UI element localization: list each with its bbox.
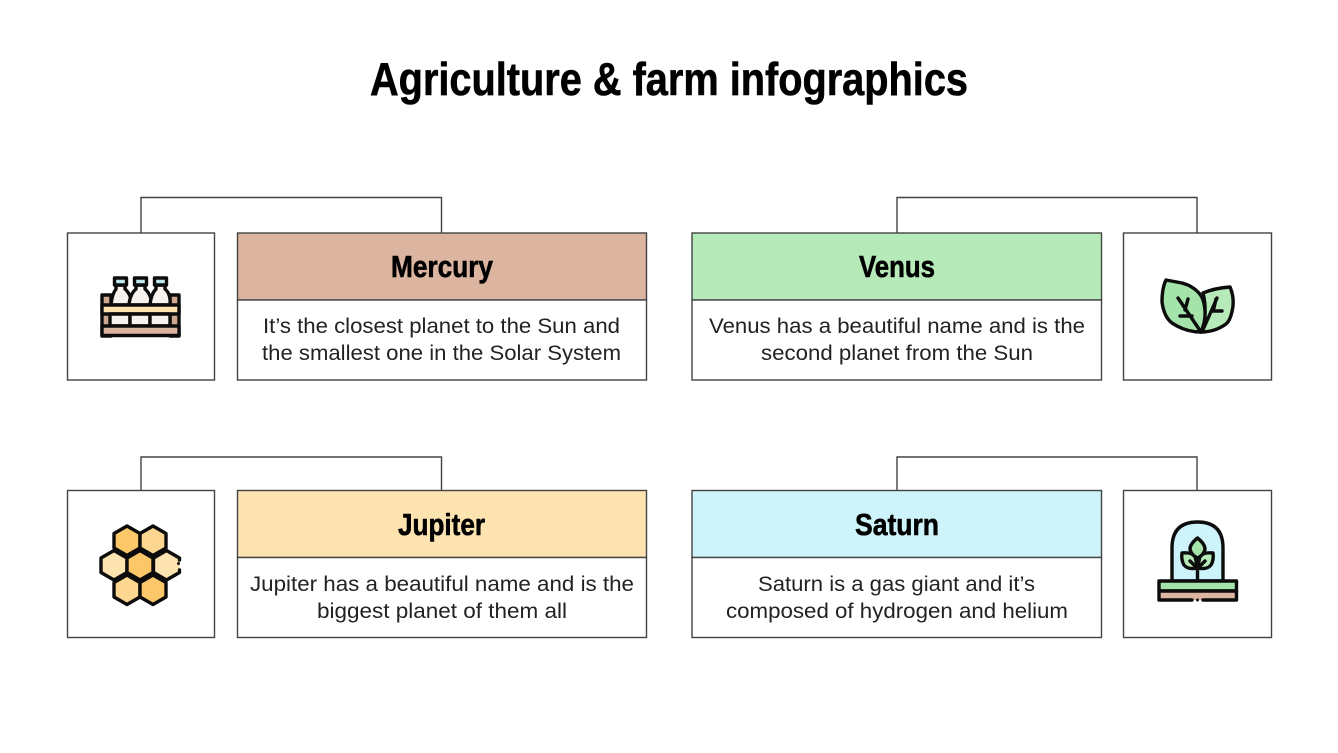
description: Venus: second planet from the Sun [761, 341, 1033, 365]
icon box: Venus [1124, 233, 1272, 380]
connector: Saturn [897, 457, 1197, 490]
header: Mercury [238, 233, 646, 300]
header: Jupiter [238, 490, 646, 558]
text box: Jupiter [238, 558, 646, 638]
description: Mercury: It’s the closest planet to the Sun and [263, 314, 620, 338]
icon box: Jupiter [68, 490, 214, 638]
panel: Saturn [692, 457, 1272, 638]
header: Saturn [692, 490, 1102, 558]
panel: Venus [692, 198, 1272, 380]
label: Mercury: Mercury [391, 249, 494, 284]
text box: Saturn [692, 558, 1102, 638]
title: Agriculture & farm infographics [370, 53, 968, 105]
panel: Mercury [68, 198, 646, 380]
description: Saturn: Saturn is a gas giant and it’s [758, 572, 1035, 596]
description: Jupiter: biggest planet of them all [317, 599, 567, 623]
description: Venus: Venus has a beautiful name and is the [709, 314, 1085, 338]
description: Mercury: the smallest one in the Solar System [262, 341, 621, 365]
connector: Mercury [141, 198, 442, 233]
icon box: Mercury [68, 233, 214, 380]
icon: greenhouse plant [1159, 522, 1236, 601]
connector: Jupiter [141, 457, 442, 490]
label: Saturn: Saturn [855, 507, 939, 542]
description: Saturn: composed of hydrogen and helium [726, 599, 1068, 623]
panel: Jupiter [68, 457, 646, 638]
connector: Venus [897, 198, 1197, 233]
label: Venus: Venus [859, 249, 935, 284]
icon: milk bottle crate [102, 278, 179, 336]
label: Jupiter: Jupiter [398, 507, 485, 542]
icon: honeycomb [101, 526, 180, 604]
header: Venus [692, 233, 1102, 300]
icon: leaves [1162, 280, 1233, 332]
icon box: Saturn [1124, 490, 1272, 638]
text box: Venus [692, 300, 1102, 380]
text box: Mercury [238, 300, 646, 380]
description: Jupiter: Jupiter has a beautiful name and is the [250, 572, 634, 596]
